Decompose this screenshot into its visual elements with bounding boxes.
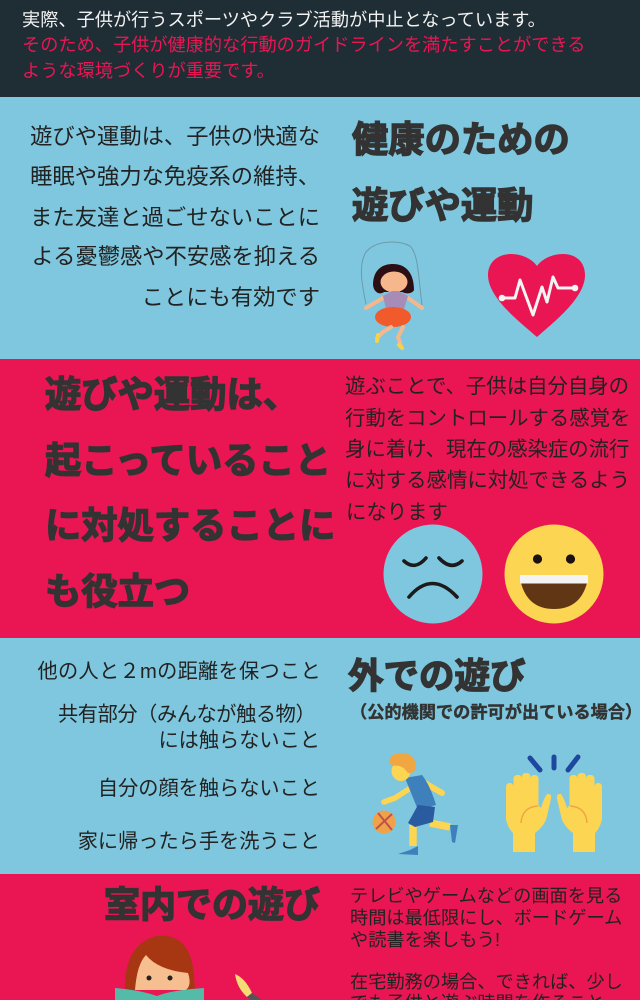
icon: child dribbling basketball xyxy=(372,753,458,855)
body text: outdoor rules: 他の人と２mの距離を保つこと xyxy=(38,661,321,683)
body text: outdoor rules: 家に帰ったら手を洗うこと xyxy=(78,831,320,853)
clap marks xyxy=(530,757,578,770)
intro text: ような環境づくりが重要です。 xyxy=(22,61,275,81)
body text: coping xyxy=(345,376,630,524)
heading: health play: 健康のための xyxy=(352,119,570,160)
icon: heart with pulse xyxy=(488,254,585,337)
body text: health benefits: 睡眠や強力な免疫系の維持、 xyxy=(30,164,320,189)
intro text: そのため、子供が健康的な行動のガイドラインを満たすことができる xyxy=(22,35,585,55)
heading: coping xyxy=(44,374,335,612)
heading: health play: 遊びや運動 xyxy=(352,185,533,226)
body text: indoor: 在宅勤務の場合、できれば、少し xyxy=(350,972,623,992)
heading: outdoor play: 外での遊び xyxy=(348,656,526,696)
body text: health benefits: 遊びや運動は、子供の快適な xyxy=(30,124,320,149)
heading: indoor play: 室内での遊び xyxy=(104,884,320,925)
panel: health xyxy=(0,97,640,359)
panel: outdoor play xyxy=(0,638,640,874)
body text: coping: に対する感情に対処できるよう xyxy=(345,470,630,492)
body text: health benefits xyxy=(30,124,320,310)
body text: outdoor rules: には触らないこと xyxy=(158,730,320,752)
intro text: 実際、子供が行うスポーツやクラブ活動が中止となっています。 xyxy=(22,10,546,30)
right raised hand xyxy=(557,773,602,852)
left raised hand xyxy=(506,773,551,852)
body text: indoor xyxy=(350,886,623,1000)
body text: health benefits: また友達と過ごせないことに xyxy=(30,205,320,230)
icon: girl reading a book xyxy=(115,936,204,1000)
icon: girl jumping rope xyxy=(361,242,422,348)
heading: coping: 起こっていること xyxy=(45,440,331,481)
body text: indoor: や読書を楽しもう! xyxy=(350,930,500,950)
heading: health play xyxy=(352,119,570,226)
heading: coping: に対処することに xyxy=(45,505,335,546)
body text: indoor: 時間は最低限にし、ボードゲーム xyxy=(350,908,622,928)
icon: sad face xyxy=(384,524,482,624)
panel: intro header xyxy=(0,0,640,97)
icon: happy face xyxy=(504,524,604,624)
body text: health benefits: ことにも有効です xyxy=(142,285,320,310)
body text: outdoor rules: 共有部分（みんなが触る物） xyxy=(58,704,315,726)
panel: coping xyxy=(0,359,640,638)
body text: coping: 身に着け、現在の感染症の流行 xyxy=(345,439,629,461)
body text: health benefits: よる憂鬱感や不安感を抑える xyxy=(31,244,320,269)
subheading: permission: （公的機関での許可が出ている場合） xyxy=(350,702,640,722)
icon: raised hands xyxy=(506,757,602,852)
heading: coping: も役立つ xyxy=(45,571,190,612)
body text: coping: 行動をコントロールする感覚を xyxy=(345,408,630,430)
heading: coping: 遊びや運動は、 xyxy=(45,374,299,415)
body text: indoor: テレビやゲームなどの画面を見る xyxy=(350,886,622,906)
intro text xyxy=(22,10,585,81)
body text: outdoor rules: 自分の顔を触らないこと xyxy=(98,778,320,800)
body text: coping: になります xyxy=(346,502,448,524)
icon: pencil xyxy=(235,974,262,1000)
body text: coping: 遊ぶことで、子供は自分自身の xyxy=(345,376,629,398)
body text: outdoor rules xyxy=(38,660,321,853)
panel: indoor play xyxy=(0,874,640,1000)
